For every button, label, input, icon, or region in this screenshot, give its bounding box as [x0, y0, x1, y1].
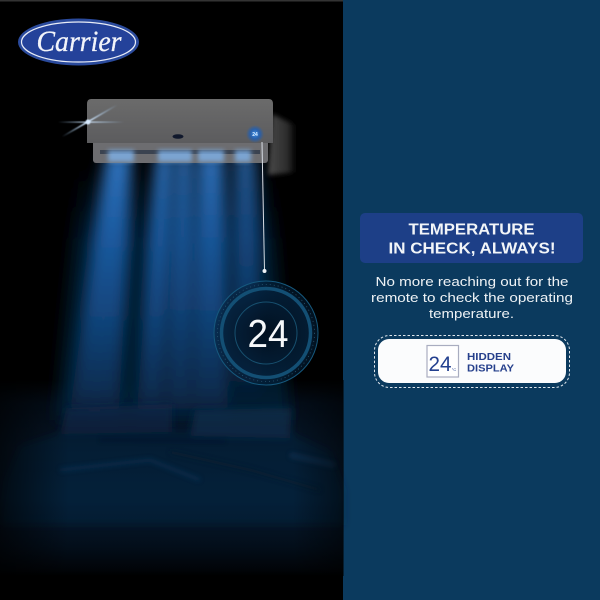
icon: display glow [246, 125, 264, 143]
panel: right navy background [343, 0, 600, 600]
text block: description [371, 274, 573, 321]
logo: Carrier: Carrier [36, 25, 122, 58]
icon: display glow: 24 [252, 132, 258, 138]
icon: carrier badge on unit [172, 134, 184, 139]
panel: dark room background [0, 0, 344, 600]
illustration: cool air beams [55, 155, 290, 425]
icon: sparkle [58, 104, 124, 138]
text block: description: temperature. [429, 306, 514, 321]
heading panel: IN CHECK, ALWAYS! [388, 240, 556, 258]
icon: display 24 [427, 346, 458, 377]
label: hidden display [467, 351, 514, 374]
text block: description: remote to check the operating [371, 290, 573, 305]
label: hidden display: DISPLAY [467, 362, 514, 374]
label: hidden display: HIDDEN [467, 351, 511, 363]
illustration: bed [0, 380, 344, 576]
callout: leader line [262, 142, 266, 273]
illustration: air conditioner unit [58, 99, 297, 175]
text block: description: No more reaching out for the [376, 274, 568, 289]
callout: temperature dial [214, 281, 318, 385]
logo: Carrier [18, 18, 139, 66]
badge: hidden display [374, 336, 570, 388]
callout: temperature dial: 24 [248, 313, 288, 356]
icon: display 24: 24 [428, 353, 452, 376]
heading panel [360, 213, 583, 263]
icon: display 24: °C [452, 367, 456, 372]
heading panel: TEMPERATURE [408, 222, 534, 238]
